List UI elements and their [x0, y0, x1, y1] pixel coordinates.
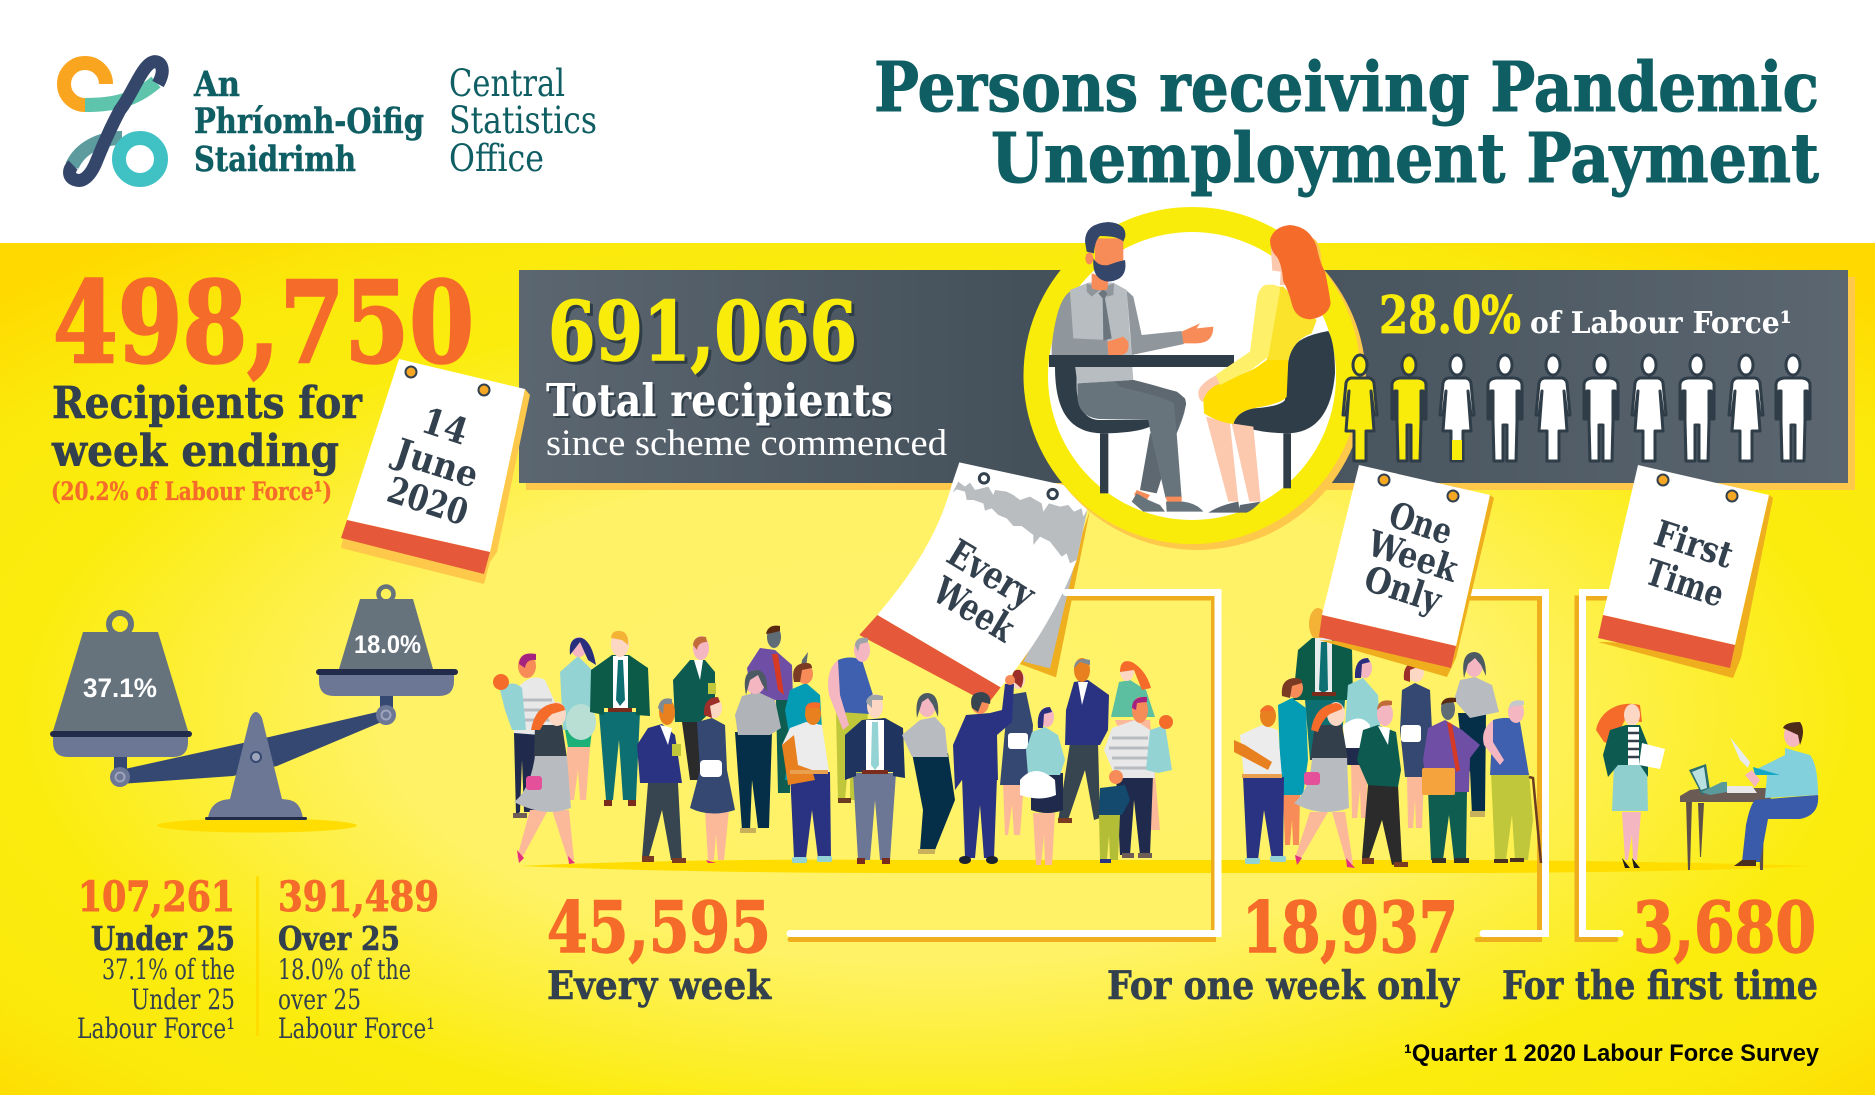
- person: woman navy dress, back: [1000, 670, 1033, 835]
- stat: share of labour force: of Labour Force¹: [1530, 306, 1792, 341]
- stats: over 25: 391,489: [278, 873, 439, 921]
- title: [874, 48, 1820, 199]
- headline: recipients for week ending: week ending: [51, 426, 339, 477]
- person: man white shirt: [782, 702, 832, 863]
- desk with laptop: [1680, 764, 1771, 870]
- connector: one week only: [1400, 592, 1546, 940]
- stats: under 25: 37.1% of the: [102, 953, 235, 986]
- stats: under 25: 107,261: [78, 873, 235, 921]
- stats: over 25: over 25: [278, 983, 361, 1016]
- stats: over 25: Over 25: [278, 919, 400, 958]
- person: woman grey top: [1454, 652, 1499, 817]
- right weight: 18.0%: 18.0%: [354, 631, 421, 659]
- background: yellow band: [0, 243, 1875, 1095]
- person: man green cardigan: [1357, 700, 1408, 867]
- connector: every week: [790, 592, 1218, 940]
- person: woman on phone, right: [1020, 707, 1065, 865]
- calendar: every week: [859, 462, 1090, 703]
- person: man dark blazer grey trousers: [845, 694, 905, 864]
- person: man purple jacket: [747, 626, 808, 793]
- person: seated man reading: [1730, 722, 1818, 866]
- stat: one week only: 18,937: [1242, 886, 1458, 969]
- person: old man with cane: [1483, 700, 1541, 863]
- panel: total recipients: since scheme commenced: [546, 423, 948, 464]
- figure: seated man: [1052, 222, 1213, 512]
- person: woman on phone: [560, 637, 596, 800]
- right weight: 18.0%: [316, 586, 458, 725]
- ground strip: [519, 860, 1810, 873]
- stat: every week: Every week: [547, 963, 772, 1009]
- logo text: Irish name: An: [193, 64, 240, 105]
- person: tall man green suit: [590, 631, 650, 806]
- left weight: 37.1%: 37.1%: [83, 673, 157, 703]
- person: woman on phone: [1343, 658, 1381, 818]
- panel: total recipients: 691,066: [548, 285, 857, 380]
- stats: under 25: Under 25: [131, 983, 235, 1016]
- calendar: one week only: One: [1384, 494, 1458, 553]
- person: woman teal dress: [1275, 678, 1308, 845]
- logo text: English name: Central: [449, 62, 565, 105]
- stat: share of labour force: 28.0%: [1379, 286, 1521, 346]
- stat: share of labour force: [1379, 286, 1792, 346]
- figure: table: [1049, 355, 1234, 367]
- stats: over 25: 18.0% of the: [278, 953, 411, 986]
- person: woman red hair green top: [1111, 661, 1160, 830]
- connector: first time: [1577, 592, 1640, 940]
- crowd: every week: [493, 626, 1173, 865]
- person: woman walking grey skirt: [1294, 702, 1355, 868]
- person: big man blue shirt: [828, 638, 873, 803]
- calendar: one week only: Week: [1362, 522, 1464, 591]
- person: woman grey top, right: [902, 693, 955, 854]
- stat: first time: 3,680: [1633, 886, 1816, 969]
- stat: one week only: For one week only: [1107, 963, 1460, 1009]
- person: man with baby, left: [493, 653, 563, 818]
- balance scale: [50, 586, 458, 832]
- person: man white shirt: [1234, 705, 1286, 864]
- calendar: every week: Week: [925, 567, 1024, 651]
- person: child: [1099, 770, 1130, 863]
- stats: under 25: [77, 873, 235, 1045]
- stats: under 25: Labour Force¹: [77, 1012, 235, 1045]
- stat: every week: [547, 886, 772, 1009]
- person: man navy suit raised arm: [953, 675, 1015, 864]
- footnote: ¹Quarter 1 2020 Labour Force Survey: [1404, 1040, 1820, 1067]
- figure: seated woman: [1198, 225, 1335, 513]
- calendar: first time: First: [1649, 512, 1739, 577]
- headline: recipients for week ending: Recipients for: [52, 378, 363, 429]
- headline: recipients for week ending: [51, 258, 474, 506]
- logo text: English name: [449, 62, 597, 180]
- calendar: first time: [1598, 465, 1773, 678]
- logo: CSO symbol: [64, 62, 162, 180]
- stat: one week only: [1107, 886, 1460, 1009]
- person: green suit man: [1293, 608, 1353, 760]
- headline: recipients for week ending: (20.2% of Labour Force¹): [51, 477, 332, 506]
- person: man navy jacket, right: [1058, 658, 1109, 823]
- illustration: interview in yellow ring: [1024, 207, 1366, 550]
- person: woman with papers: [1596, 704, 1665, 868]
- crowd: one week only: [1234, 608, 1541, 868]
- calendar: every week: Every: [940, 530, 1044, 617]
- stats: over 25: [278, 873, 439, 1045]
- calendar: one week only: Only: [1359, 558, 1447, 622]
- headline: recipients for week ending: 498,750: [53, 258, 474, 389]
- logo text: Irish name: [193, 64, 424, 180]
- stat: first time: For the first time: [1502, 963, 1818, 1009]
- panel: total recipients: [519, 270, 1855, 490]
- stat: first time: [1502, 886, 1818, 1009]
- person: man purple jacket: [1422, 698, 1480, 863]
- person: man striped sweater with baby: [1104, 697, 1173, 858]
- calendar: 14 June 2020: [341, 359, 530, 584]
- calendar: 14 June 2020: 14: [416, 400, 473, 454]
- person: woman grey top dark pants: [735, 670, 781, 833]
- calendar: first time: Time: [1640, 551, 1729, 616]
- logo text: Irish name: Phríomh-Oifig: [194, 101, 424, 142]
- logo text: English name: Statistics: [449, 99, 597, 142]
- stats: over 25: Labour Force¹: [278, 1012, 435, 1045]
- stat: every week: 45,595: [547, 886, 771, 969]
- calendar: one week only: [1319, 465, 1494, 677]
- pictogram: ten people, 28% filled: [1343, 355, 1810, 461]
- calendar: 14 June 2020: June: [387, 430, 484, 497]
- person: woman teal dress: [785, 663, 822, 780]
- stats: under 25: Under 25: [91, 919, 235, 958]
- logo text: English name: Office: [449, 137, 544, 180]
- person: man green cardigan: [673, 636, 716, 780]
- person: woman navy dress: [1400, 662, 1432, 828]
- person: woman navy dress white bag: [690, 697, 735, 863]
- divider: [256, 876, 259, 1036]
- logo text: Irish name: Staidrimh: [194, 139, 356, 180]
- person: woman orange hair grey skirt: [514, 702, 575, 864]
- calendar: 14 June 2020: 2020: [382, 469, 473, 534]
- panel: total recipients: Total recipients: [546, 374, 893, 427]
- person: man blue jacket walking: [637, 698, 686, 863]
- left weight: 37.1%: [50, 613, 192, 787]
